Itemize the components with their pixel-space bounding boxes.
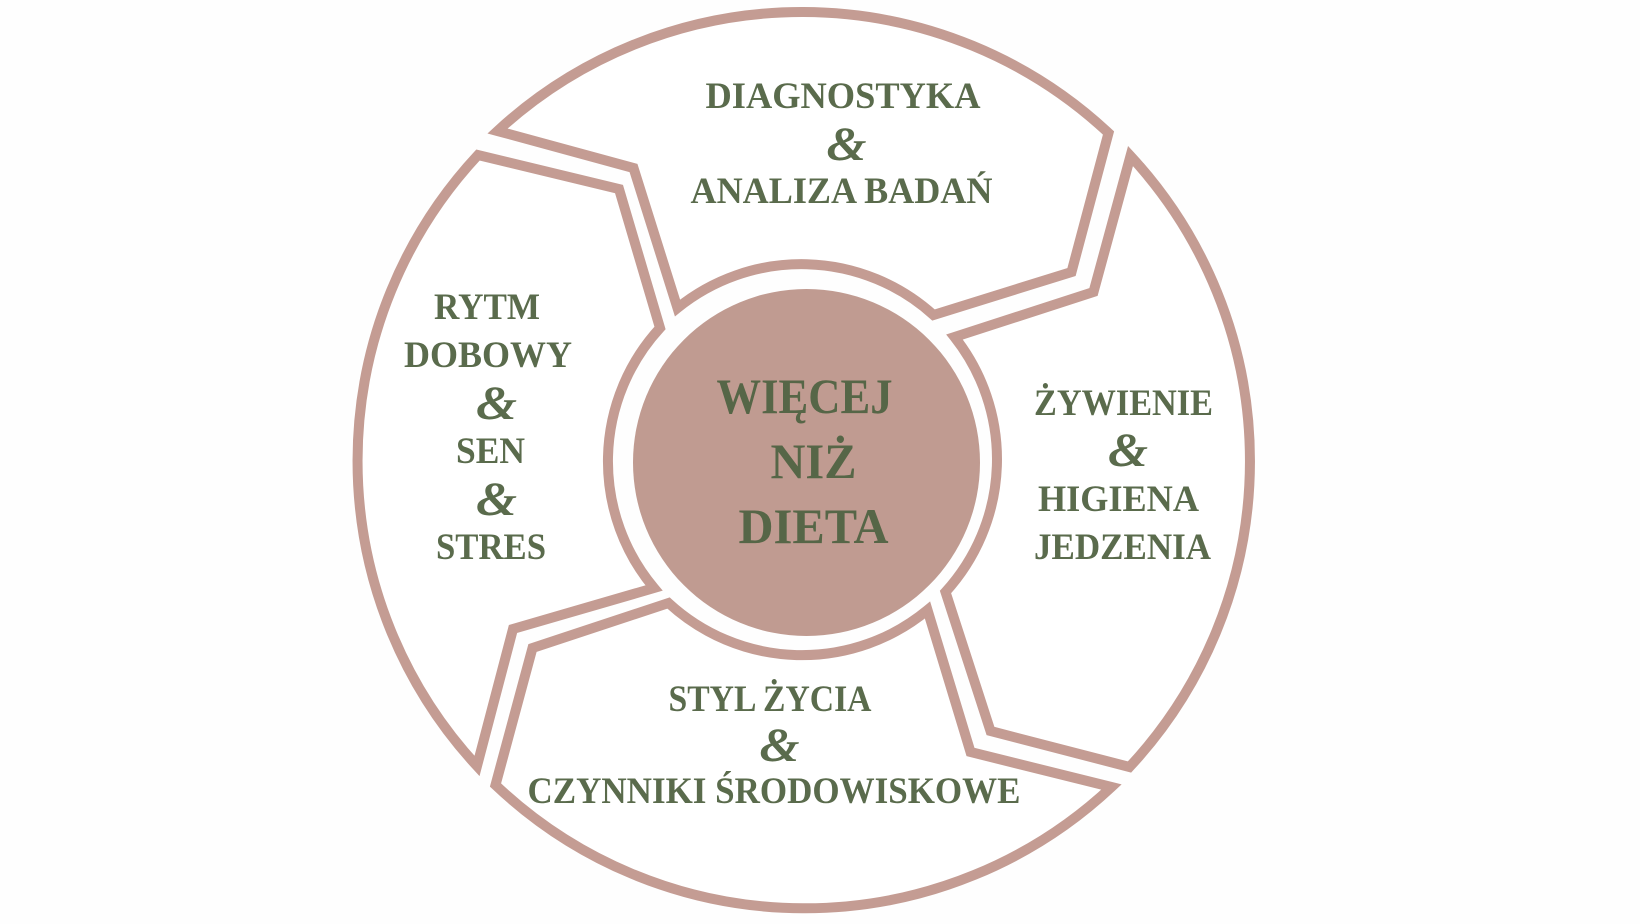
center title: DIETA	[738, 498, 888, 554]
center title: WIĘCEJ	[716, 368, 892, 424]
label: żywienie i higiena jedzenia: HIGIENA	[1038, 479, 1199, 520]
center disc	[633, 289, 980, 636]
label: żywienie i higiena jedzenia	[1034, 382, 1213, 568]
label: rytm dobowy, sen, stres: RYTM	[434, 287, 540, 328]
center title: NIŻ	[770, 433, 856, 489]
label: rytm dobowy, sen, stres: &	[476, 473, 517, 526]
label: diagnostyka i analiza badań: DIAGNOSTYKA	[706, 76, 981, 117]
label: żywienie i higiena jedzenia: &	[1108, 424, 1148, 477]
label: rytm dobowy, sen, stres: SEN	[456, 431, 525, 472]
label: diagnostyka i analiza badań	[690, 76, 993, 212]
label: rytm dobowy, sen, stres	[404, 287, 572, 568]
segment: diagnostyka outline	[498, 12, 1108, 315]
label: styl życia i czynniki środowiskowe	[528, 678, 1020, 812]
label: rytm dobowy, sen, stres: STRES	[436, 527, 546, 568]
label: styl życia i czynniki środowiskowe: STYL ŻYCIA	[668, 678, 872, 720]
label: rytm dobowy, sen, stres: DOBOWY	[404, 335, 572, 376]
segment: rytm dobowy outline	[358, 155, 660, 766]
label: diagnostyka i analiza badań: ANALIZA BADAŃ	[690, 170, 993, 212]
label: styl życia i czynniki środowiskowe: CZYNNIKI ŚRODOWISKOWE	[528, 770, 1020, 812]
center title	[716, 368, 892, 554]
label: żywienie i higiena jedzenia: ŻYWIENIE	[1034, 382, 1213, 424]
label: styl życia i czynniki środowiskowe: &	[760, 719, 800, 772]
segment: żywienie outline	[946, 156, 1250, 767]
label: żywienie i higiena jedzenia: JEDZENIA	[1034, 527, 1211, 568]
label: diagnostyka i analiza badań: &	[826, 118, 866, 171]
label: rytm dobowy, sen, stres: &	[476, 377, 517, 430]
segment: styl życia outline	[496, 603, 1112, 908]
